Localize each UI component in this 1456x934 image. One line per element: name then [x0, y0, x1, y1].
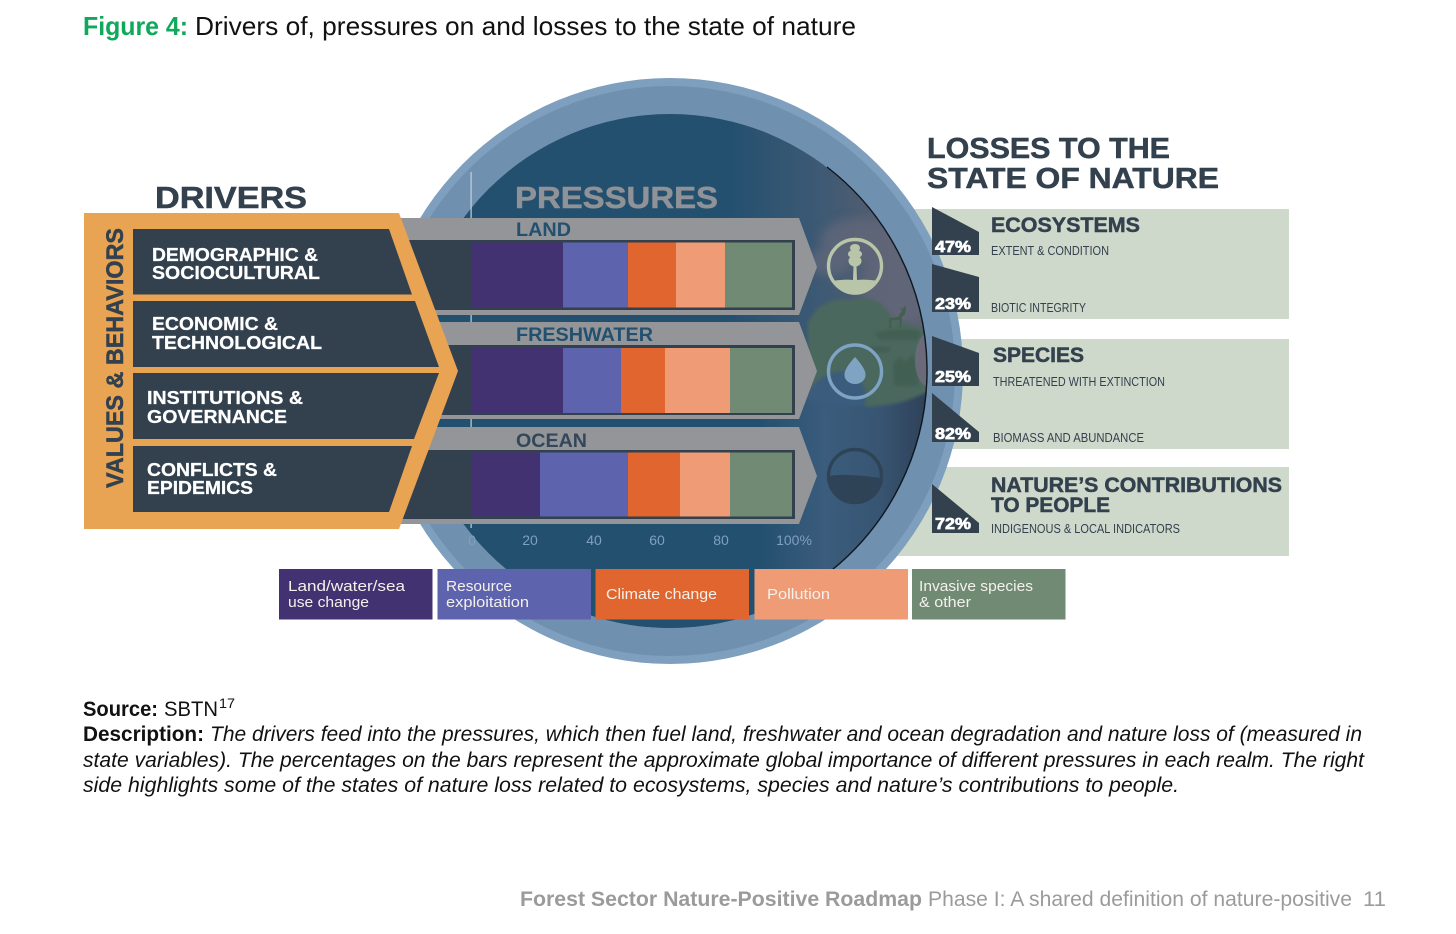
tag: 72%: 72%: [935, 516, 971, 533]
legend: [279, 569, 1066, 620]
legend: invasive species and other: Invasive species: [919, 578, 1033, 595]
tag: 47%: 47%: [935, 239, 971, 256]
driver: institutions and governance: GOVERNANCE: [147, 407, 287, 427]
source line: [83, 695, 235, 721]
panel: species: THREATENED WITH EXTINCTION: [993, 374, 1165, 389]
panel: ecosystems: EXTENT & CONDITION: [991, 243, 1109, 258]
globe circle: [377, 78, 963, 664]
label: freshwater: FRESHWATER: [516, 325, 653, 346]
tag: 23%: 23%: [935, 296, 971, 313]
driver: conflicts and epidemics: CONFLICTS &: [147, 460, 277, 480]
source line: Source:: [83, 698, 158, 721]
driver: conflicts and epidemics: [133, 446, 412, 512]
panel: losses background bands: [880, 209, 1289, 556]
driver: demographic and sociocultural: SOCIOCULTURAL: [152, 263, 320, 283]
axis labels: 100%: [776, 532, 812, 548]
tag: 82%: [932, 393, 979, 443]
driver: conflicts and epidemics: EPIDEMICS: [147, 478, 253, 498]
legend: invasive species and other: & other: [919, 594, 971, 611]
panel: species: [932, 336, 1165, 445]
white axis line: [470, 172, 472, 528]
label: values and behaviors: VALUES & BEHAVIORS: [102, 228, 129, 488]
heading: pressures: PRESSURES: [515, 180, 718, 215]
driver: economic and technological: TECHNOLOGICAL: [152, 333, 322, 353]
title: Drivers of, pressures on and losses to the state of nature: [195, 11, 856, 41]
driver: institutions and governance: INSTITUTIONS &: [147, 388, 303, 408]
icon: ocean: [828, 450, 882, 503]
title: Figure 4:: [83, 11, 188, 41]
tag: 25%: [932, 336, 979, 386]
panel: nature's contributions to people: [932, 474, 1282, 536]
axis labels: 80: [713, 532, 729, 548]
footer: Phase I: A shared definition of nature-positive: [928, 888, 1352, 911]
description text: The drivers feed into the pressures, which then fuel land, freshwater and ocean degradation and nature loss of (measured in: [210, 723, 1362, 746]
heading: losses to the state of nature: STATE OF NATURE: [927, 163, 1219, 195]
legend: land/water/sea use change: use change: [288, 594, 369, 611]
tag: 82%: 82%: [935, 426, 971, 443]
legend: climate change: Climate change: [606, 586, 717, 603]
panel: drivers: [84, 180, 458, 529]
legend: land/water/sea use change: [279, 569, 432, 620]
panel: nature's contributions to people: INDIGENOUS & LOCAL INDICATORS: [991, 521, 1180, 536]
icon: tree: [828, 240, 882, 295]
heading: losses to the state of nature: [927, 133, 1219, 195]
driver: demographic and sociocultural: DEMOGRAPHIC &: [152, 245, 318, 265]
tag: 72%: [932, 484, 979, 533]
description text: [83, 723, 1365, 797]
legend: climate change: [596, 569, 749, 620]
heading: drivers: DRIVERS: [155, 180, 307, 215]
legend: resource exploitation: Resource: [446, 578, 512, 595]
label: ocean: OCEAN: [516, 431, 587, 452]
panel: species: SPECIES: [993, 344, 1084, 367]
driver: institutions and governance: [133, 373, 439, 439]
panel: nature's contributions to people: NATURE’S CONTRIBUTIONS: [991, 474, 1282, 497]
description text: side highlights some of the states of nature loss related to ecosystems, species and nature’s contributions to people.: [83, 774, 1179, 797]
bar: land: [390, 218, 817, 315]
description text: Description:: [83, 723, 204, 746]
panel: ecosystems: ECOSYSTEMS: [991, 214, 1140, 237]
tag: 25%: 25%: [935, 369, 971, 386]
axis labels: 0: [468, 532, 476, 548]
legend: resource exploitation: exploitation: [446, 594, 529, 611]
panel: species: BIOMASS AND ABUNDANCE: [993, 430, 1144, 445]
description text: state variables). The percentages on the bars represent the approximate global importance of different pressures in each realm. The right: [83, 749, 1365, 772]
heading: losses to the state of nature: LOSSES TO THE: [927, 133, 1170, 165]
deer silhouette: [889, 305, 906, 328]
source line: SBTN: [164, 698, 218, 721]
driver: demographic and sociocultural: [133, 229, 412, 294]
panel: nature's contributions to people: TO PEOPLE: [991, 494, 1110, 517]
legend: resource exploitation: [438, 569, 591, 620]
driver: economic and technological: [133, 301, 439, 367]
footer: Forest Sector Nature-Positive Roadmap: [520, 888, 922, 911]
legend: invasive species and other: [912, 569, 1066, 620]
icon: water drop: [828, 345, 882, 398]
panel: ecosystems: BIOTIC INTEGRITY: [991, 300, 1086, 315]
panel: ecosystems: [932, 207, 1140, 315]
footer: 11: [1363, 888, 1386, 911]
source line: 17: [219, 695, 235, 711]
legend: land/water/sea use change: Land/water/sea: [288, 578, 406, 595]
bar: ocean: [390, 427, 817, 524]
legend: pollution: [754, 569, 908, 620]
driver: economic and technological: ECONOMIC &: [152, 314, 278, 334]
footer: [520, 888, 1386, 911]
legend: pollution: Pollution: [767, 586, 830, 603]
axis labels: 40: [586, 532, 602, 548]
bar: freshwater: [390, 322, 817, 419]
tag: 23%: [932, 264, 979, 313]
tag: 47%: [932, 207, 979, 256]
axis labels: [468, 532, 812, 548]
axis labels: 20: [522, 532, 538, 548]
axis labels: 60: [649, 532, 665, 548]
label: land: LAND: [516, 220, 571, 241]
